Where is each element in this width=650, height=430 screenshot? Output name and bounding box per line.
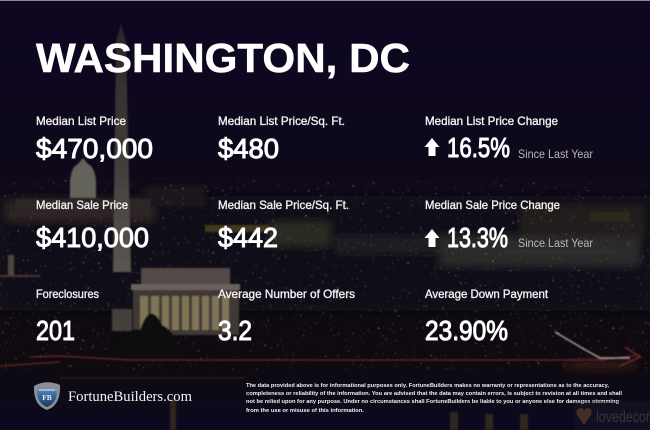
disclaimer text: The data provided above is for informational purposes only. FortuneBuilders makes no warranty or representations as to the accuracy,	[246, 383, 609, 389]
stat: average number of offers	[218, 287, 355, 346]
disclaimer text: completeness or reliability of the information. You are advised that the data may contain errors, is subject to revision at all times and shall	[246, 391, 622, 397]
capitol dome	[15, 158, 150, 216]
disclaimer text: not be relied upon for any purpose. Under no circumstances shall FortuneBuilders be liable to you or anyone else for damages stemming	[246, 399, 620, 405]
stat: median sale price: Median Sale Price	[36, 198, 128, 212]
icon: shield	[34, 382, 60, 410]
stat: median list price change: Median List Price Change	[425, 114, 558, 128]
stat: median list price per sq ft	[218, 114, 345, 164]
stat: median sale price per sq ft	[218, 198, 349, 253]
city lights	[0, 180, 650, 370]
city details and reflections	[0, 212, 640, 430]
stat: foreclosures	[36, 287, 99, 346]
stat: median sale price change: Median Sale Price Change	[425, 198, 560, 212]
stat: average number of offers: 3.2	[218, 315, 252, 346]
lincoln memorial	[105, 268, 240, 360]
icon: up arrow	[424, 138, 440, 156]
stat: median list price per sq ft: $480	[218, 133, 279, 164]
stat: median list price: $470,000	[36, 133, 153, 164]
stat: median list price per sq ft: Median List Price/Sq. Ft.	[218, 114, 345, 128]
title: WASHINGTON, DC	[36, 35, 410, 81]
disclaimer text: from the use or misuse of this information.	[246, 408, 364, 414]
stat: foreclosures: Foreclosures	[36, 287, 99, 301]
logo: FortuneBuilders	[34, 382, 192, 410]
stat: median sale price change	[424, 198, 593, 253]
stat: median list price change	[424, 114, 593, 163]
stat: average number of offers: Average Number of Offers	[218, 287, 355, 301]
icon: shield: FB	[42, 393, 52, 402]
stat: median list price: Median List Price	[36, 114, 126, 128]
stat: foreclosures: 201	[36, 315, 75, 346]
stat: average down payment	[425, 287, 549, 346]
stat: median list price change: 16.5%	[447, 132, 510, 163]
washington monument	[113, 24, 131, 272]
stat: median sale price	[36, 198, 149, 253]
stat: median sale price: $410,000	[36, 222, 149, 253]
stat: median sale price per sq ft: $442	[218, 222, 278, 253]
stat: median list price	[36, 114, 153, 164]
disclaimer text	[246, 383, 622, 414]
stat: average down payment: 23.90%	[425, 315, 508, 346]
logo: FortuneBuilders: FortuneBuilders.com	[68, 389, 192, 405]
watermark: lovedecor	[575, 401, 650, 430]
stat: median sale price change: 13.3%	[447, 222, 508, 253]
icon: heart	[576, 408, 592, 425]
stat: median list price change: Since Last Year	[518, 147, 593, 161]
stat: average down payment: Average Down Payment	[425, 287, 549, 301]
stat: median sale price per sq ft: Median Sale Price/Sq. Ft.	[218, 198, 349, 212]
stat: median sale price change: Since Last Year	[518, 236, 593, 250]
icon: up arrow	[424, 229, 440, 247]
